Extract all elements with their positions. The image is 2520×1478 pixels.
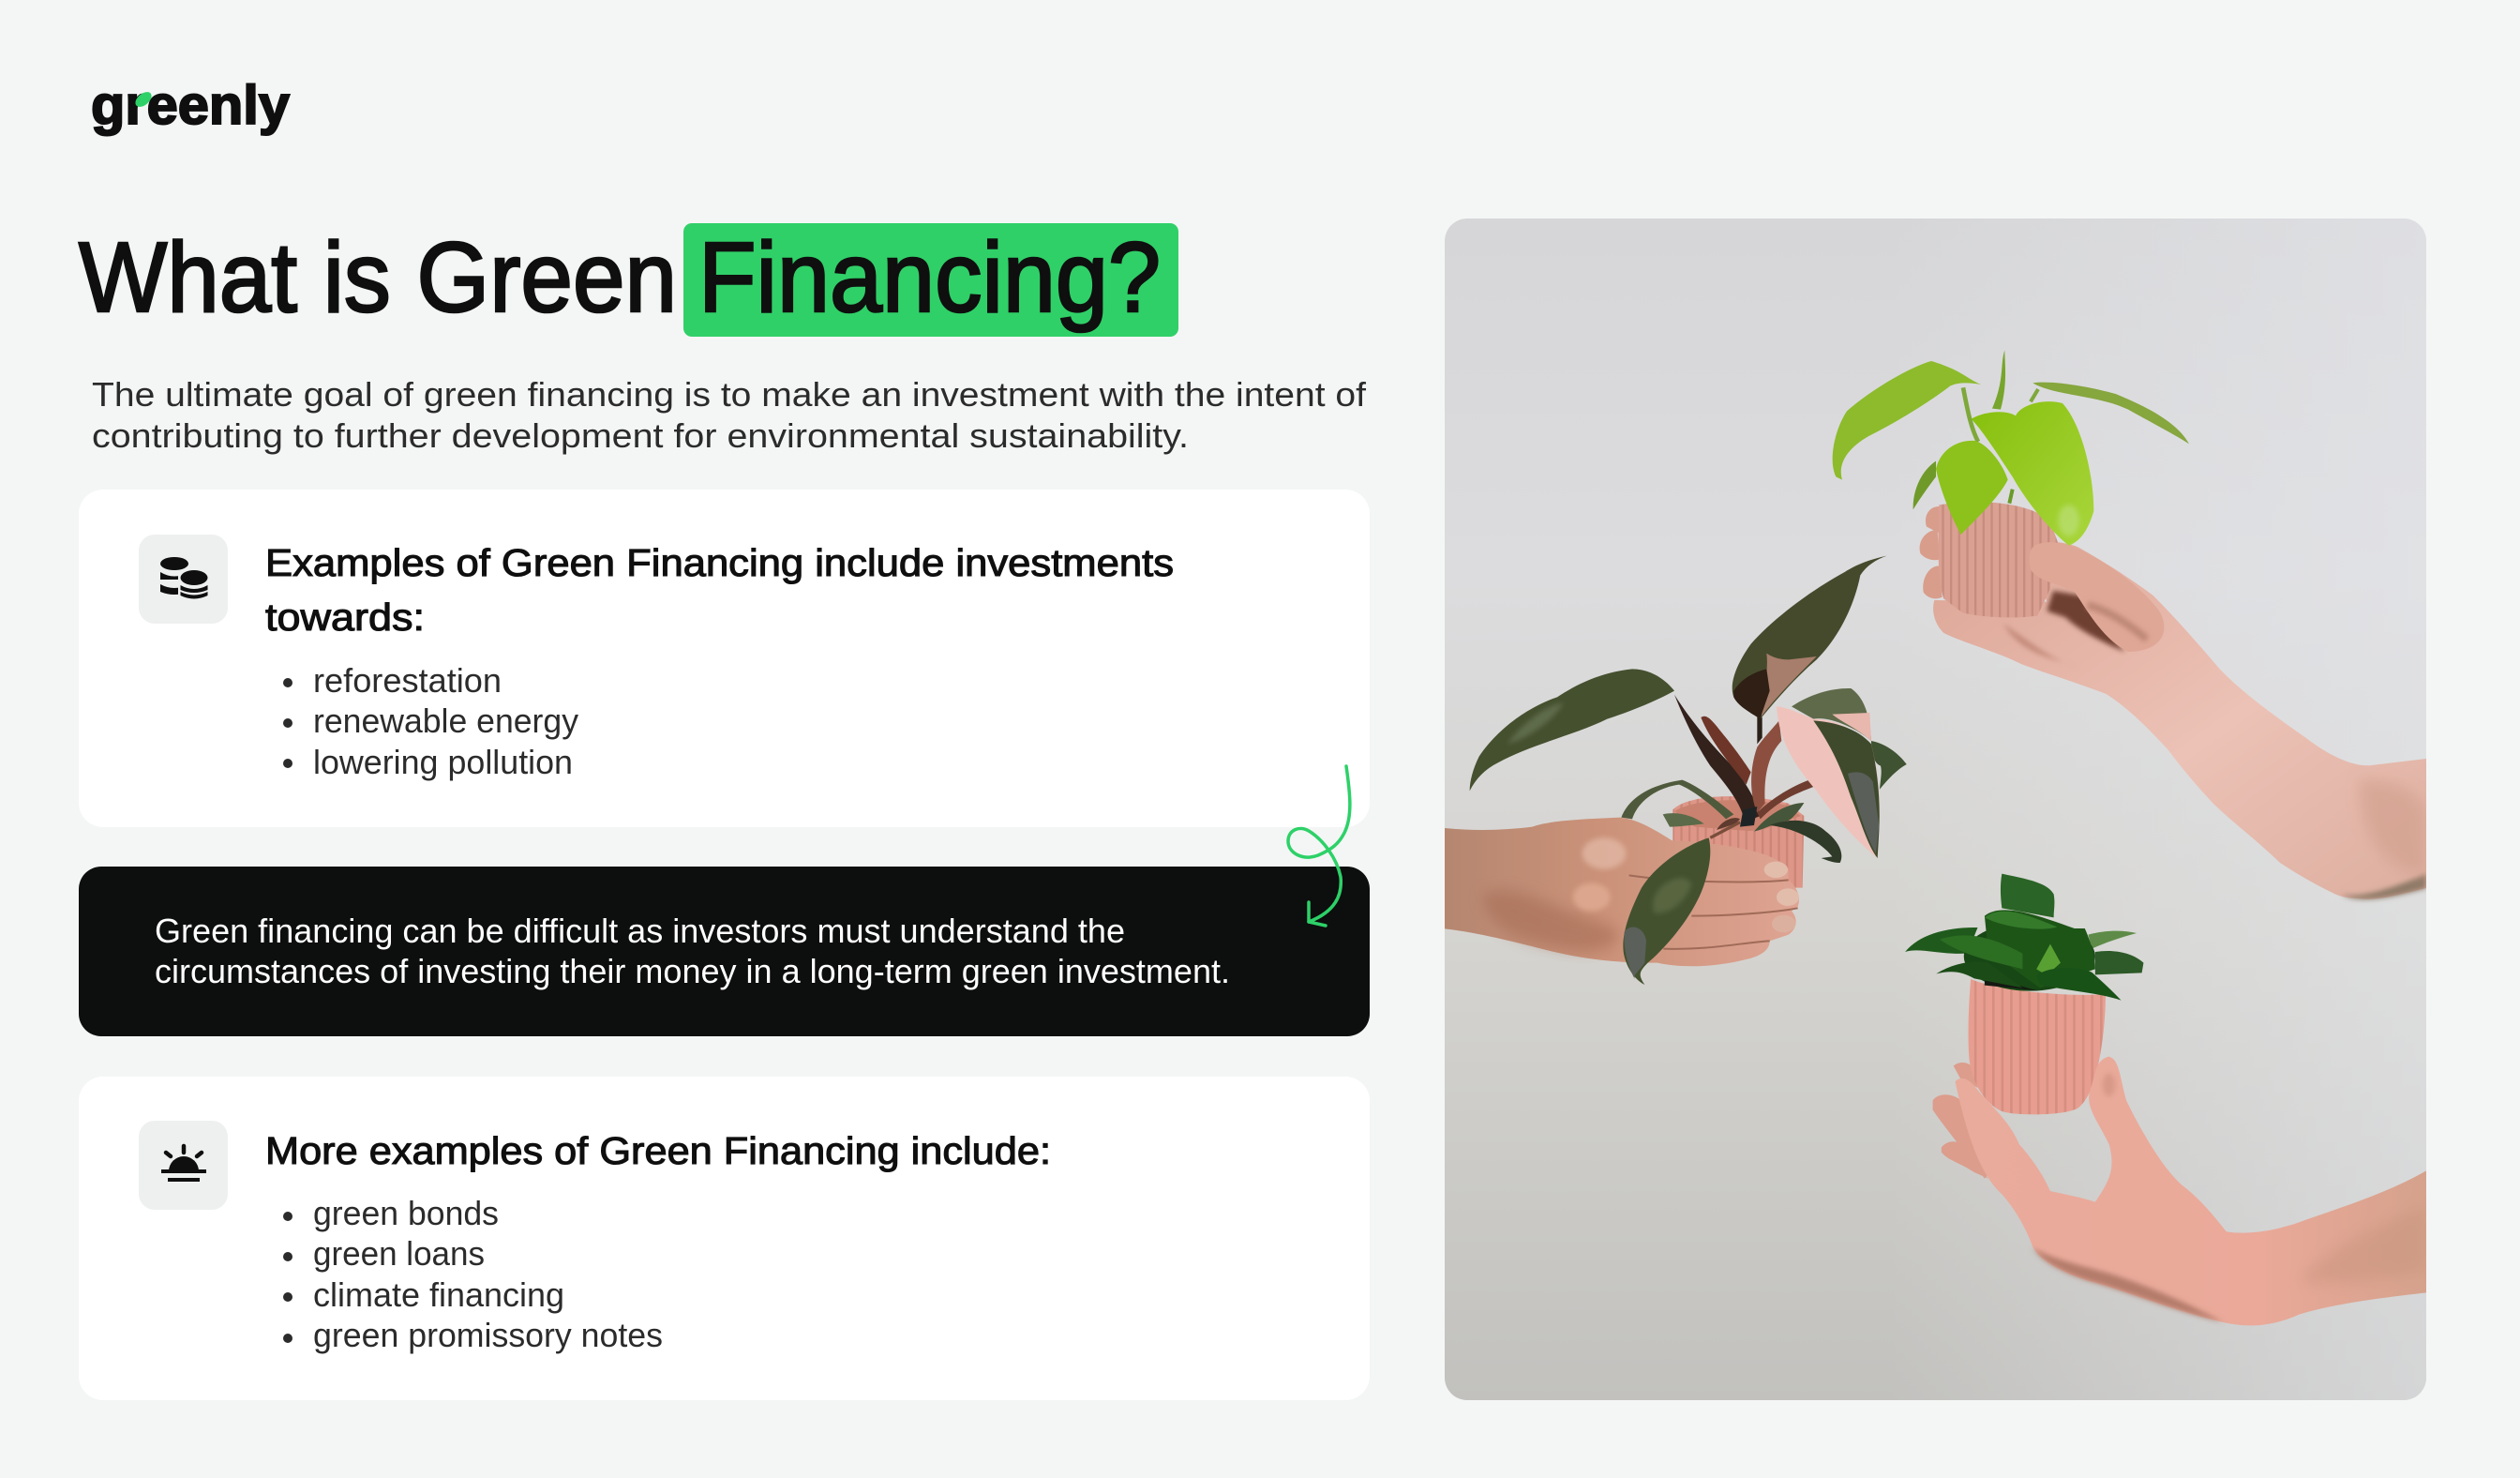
bullet list: green bonds <box>313 1194 499 1232</box>
title: Financing? <box>698 222 1161 333</box>
intro text: The ultimate goal of green financing is to make an investment with the intent of <box>92 375 1367 414</box>
bullet list: green loans <box>313 1234 485 1273</box>
bullet list: green promissory notes <box>313 1316 663 1354</box>
bullet list: reforestation <box>313 661 502 700</box>
title: What is Green <box>79 222 677 333</box>
bullet list: renewable energy <box>313 701 578 740</box>
icon: coins <box>139 535 228 624</box>
panel heading: Examples of Green Financing include investments <box>265 541 1174 584</box>
callout: dark panel: circumstances of investing their money in a long-term green investment. <box>155 952 1230 990</box>
panel heading <box>265 541 1174 639</box>
panel heading: towards: <box>265 596 425 639</box>
callout: dark panel: Green financing can be difficult as investors must understand the <box>155 912 1125 950</box>
panel: examples of green financing <box>79 490 1370 827</box>
arrow: green squiggle <box>1288 766 1350 926</box>
bullet list: climate financing <box>313 1275 564 1314</box>
icon: sunrise <box>139 1121 228 1210</box>
panel heading: More examples of Green Financing include: <box>265 1129 1051 1172</box>
lower hand with dark green plant <box>1905 874 2426 1325</box>
callout: dark panel <box>79 867 1370 1036</box>
bullet list <box>283 1194 663 1354</box>
panel: more examples <box>79 1077 1370 1400</box>
intro text <box>92 375 1367 455</box>
intro text: contributing to further development for environmental sustainability. <box>92 416 1189 455</box>
bullet list <box>283 661 578 781</box>
photo: three hands holding potted plants <box>1442 219 2426 1400</box>
bullet list: lowering pollution <box>313 743 573 781</box>
upper hand with lime plant <box>1833 350 2426 899</box>
greenly logo: greenly <box>91 75 290 136</box>
left hand with variegated plant <box>1442 556 1907 985</box>
title <box>79 222 1178 337</box>
